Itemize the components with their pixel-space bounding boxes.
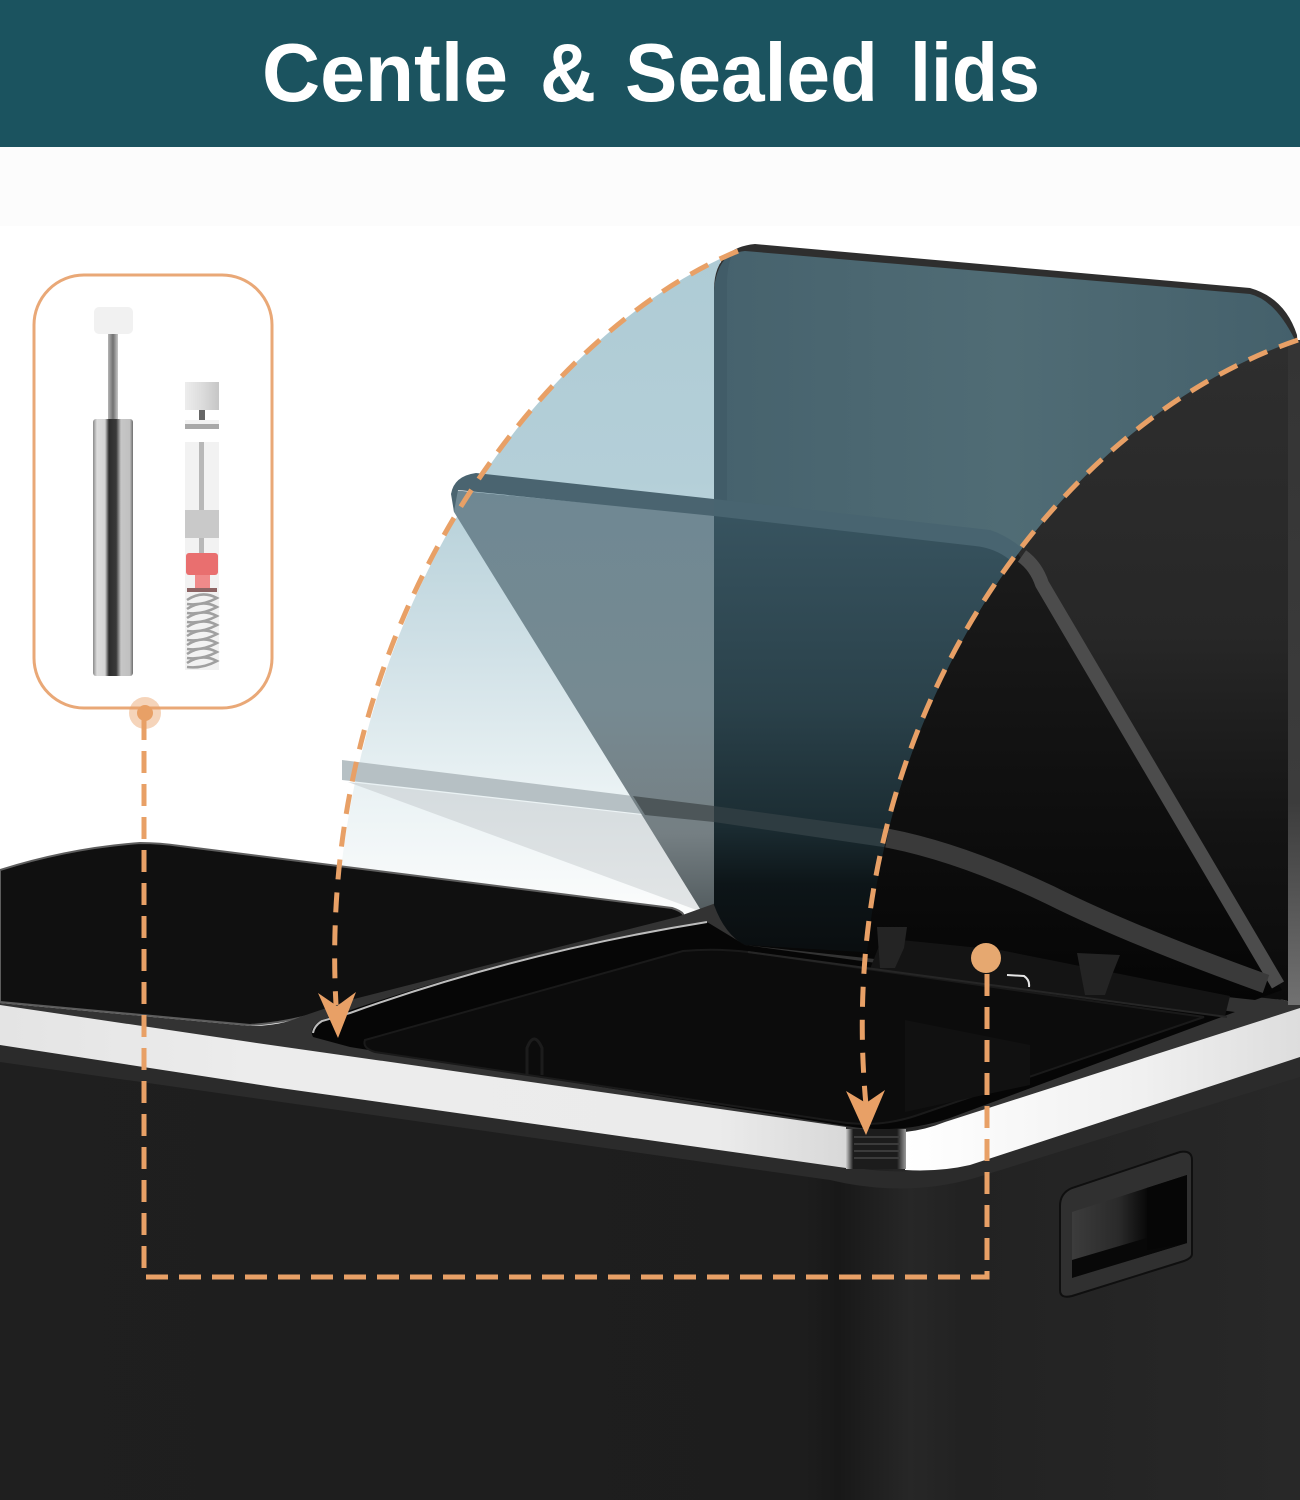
lid right edge strip (1288, 340, 1300, 1005)
metal hook (1007, 975, 1029, 987)
back lid tinted panel (714, 251, 1295, 620)
left compartment closed opening (0, 843, 684, 1025)
inner bucket (364, 950, 1204, 1124)
hinge marker dot (971, 943, 1001, 973)
side handle (1060, 1152, 1192, 1297)
lid left edge stripe (714, 258, 726, 290)
orange dashed arc: outer (335, 251, 738, 1005)
bucket back edge (748, 952, 1227, 1017)
right compartment opening (312, 922, 1235, 1129)
arrowhead: inner arc (846, 1090, 885, 1135)
lid front black triangle (714, 500, 1282, 1000)
hinge right (1077, 953, 1120, 995)
tinted ghost bar (714, 806, 890, 848)
silver rim front (0, 1005, 846, 1168)
title banner: lids (910, 26, 1040, 119)
opening sweep: pale blue sector (335, 251, 738, 1035)
ghost lid: lowest position (342, 760, 714, 925)
top deck (0, 903, 1300, 1130)
title banner: & (540, 26, 596, 119)
silver rim right (905, 1008, 1300, 1170)
arrowhead: outer arc (318, 992, 356, 1038)
tinted front lid top bar (714, 512, 1022, 560)
orange dashed arc: inner (862, 340, 1298, 1105)
ribbed rim corner (846, 1129, 906, 1169)
inner bucket shadow panel (905, 1020, 1030, 1112)
front lid: translucent mid position (451, 473, 714, 930)
tinted lower panel (714, 516, 1009, 952)
hinge left (877, 927, 907, 968)
hinge rail (870, 938, 1230, 1016)
lid lower curved bar (887, 838, 1266, 984)
title banner: Centle (262, 26, 508, 119)
teal tinted lid sweep (714, 251, 1295, 960)
opening edge highlight (313, 922, 707, 1033)
detail inset panel (34, 275, 272, 729)
raised black lid (714, 244, 1300, 1017)
body upper dark band (0, 1045, 1300, 1189)
spring coils (187, 594, 217, 667)
title banner: Sealed (625, 26, 878, 119)
lid side edge bar (1022, 556, 1278, 985)
piston cutaway (185, 382, 219, 670)
connector marker (129, 697, 161, 729)
bin body (0, 843, 1300, 1500)
dashed connector from detail inset to hinge (144, 718, 987, 1277)
piston assembled (93, 307, 133, 676)
title banner (0, 0, 1300, 147)
bucket handle loop (527, 1039, 542, 1075)
